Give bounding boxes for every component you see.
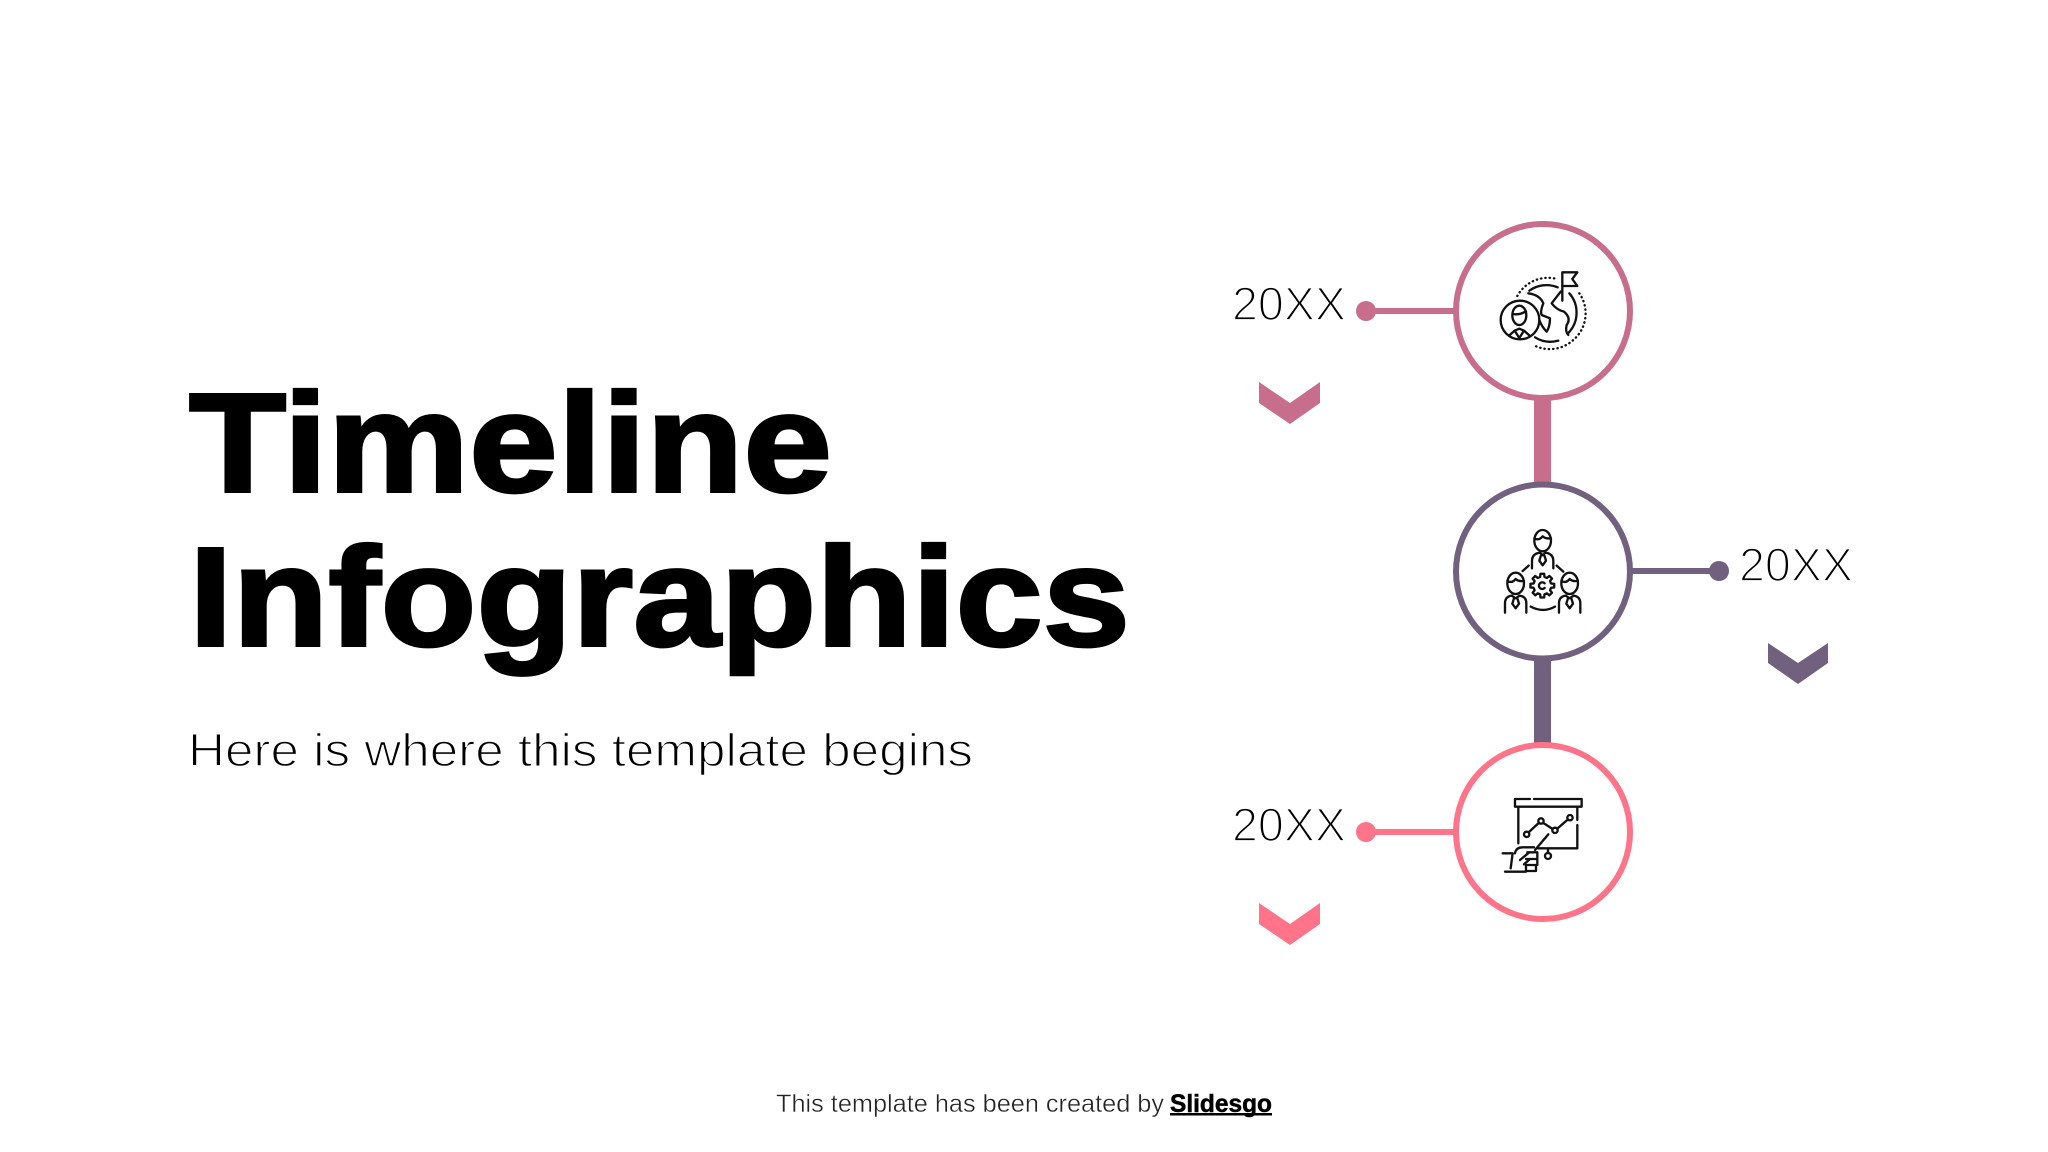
milestone 1 xyxy=(1232,224,1630,424)
milestone 3 xyxy=(1232,745,1630,945)
person left xyxy=(1505,573,1526,613)
footer credit: This template has been created by xyxy=(776,1090,1165,1118)
label: year 2: 20XX xyxy=(1739,538,1853,591)
circle 1 xyxy=(1456,224,1630,398)
chevron 1 xyxy=(1259,382,1320,424)
title: Timeline xyxy=(189,364,832,522)
leader line 2 xyxy=(1631,561,1729,581)
icon: globe with person and flag xyxy=(1501,272,1586,349)
circle 3 xyxy=(1456,745,1630,919)
label: year 3: 20XX xyxy=(1232,798,1346,851)
title xyxy=(189,364,1130,676)
title: Infographics xyxy=(189,518,1130,676)
connector: purple xyxy=(1534,658,1551,744)
person top xyxy=(1532,530,1553,568)
icon: team with gear xyxy=(1505,530,1580,613)
label: year 1: 20XX xyxy=(1232,277,1346,330)
circle 2 xyxy=(1456,484,1630,658)
icon: presentation board with hand xyxy=(1503,799,1582,872)
connector: pink xyxy=(1534,398,1551,484)
leader line 3 xyxy=(1356,822,1455,842)
milestone 2 xyxy=(1456,484,1853,684)
chevron 3 xyxy=(1259,903,1320,945)
person right xyxy=(1559,573,1580,613)
gear xyxy=(1530,574,1554,598)
chevron 2 xyxy=(1768,643,1828,684)
footer credit: Slidesgo xyxy=(1170,1090,1272,1118)
subtitle: Here is where this template begins xyxy=(188,724,973,776)
leader line 1 xyxy=(1356,301,1455,321)
